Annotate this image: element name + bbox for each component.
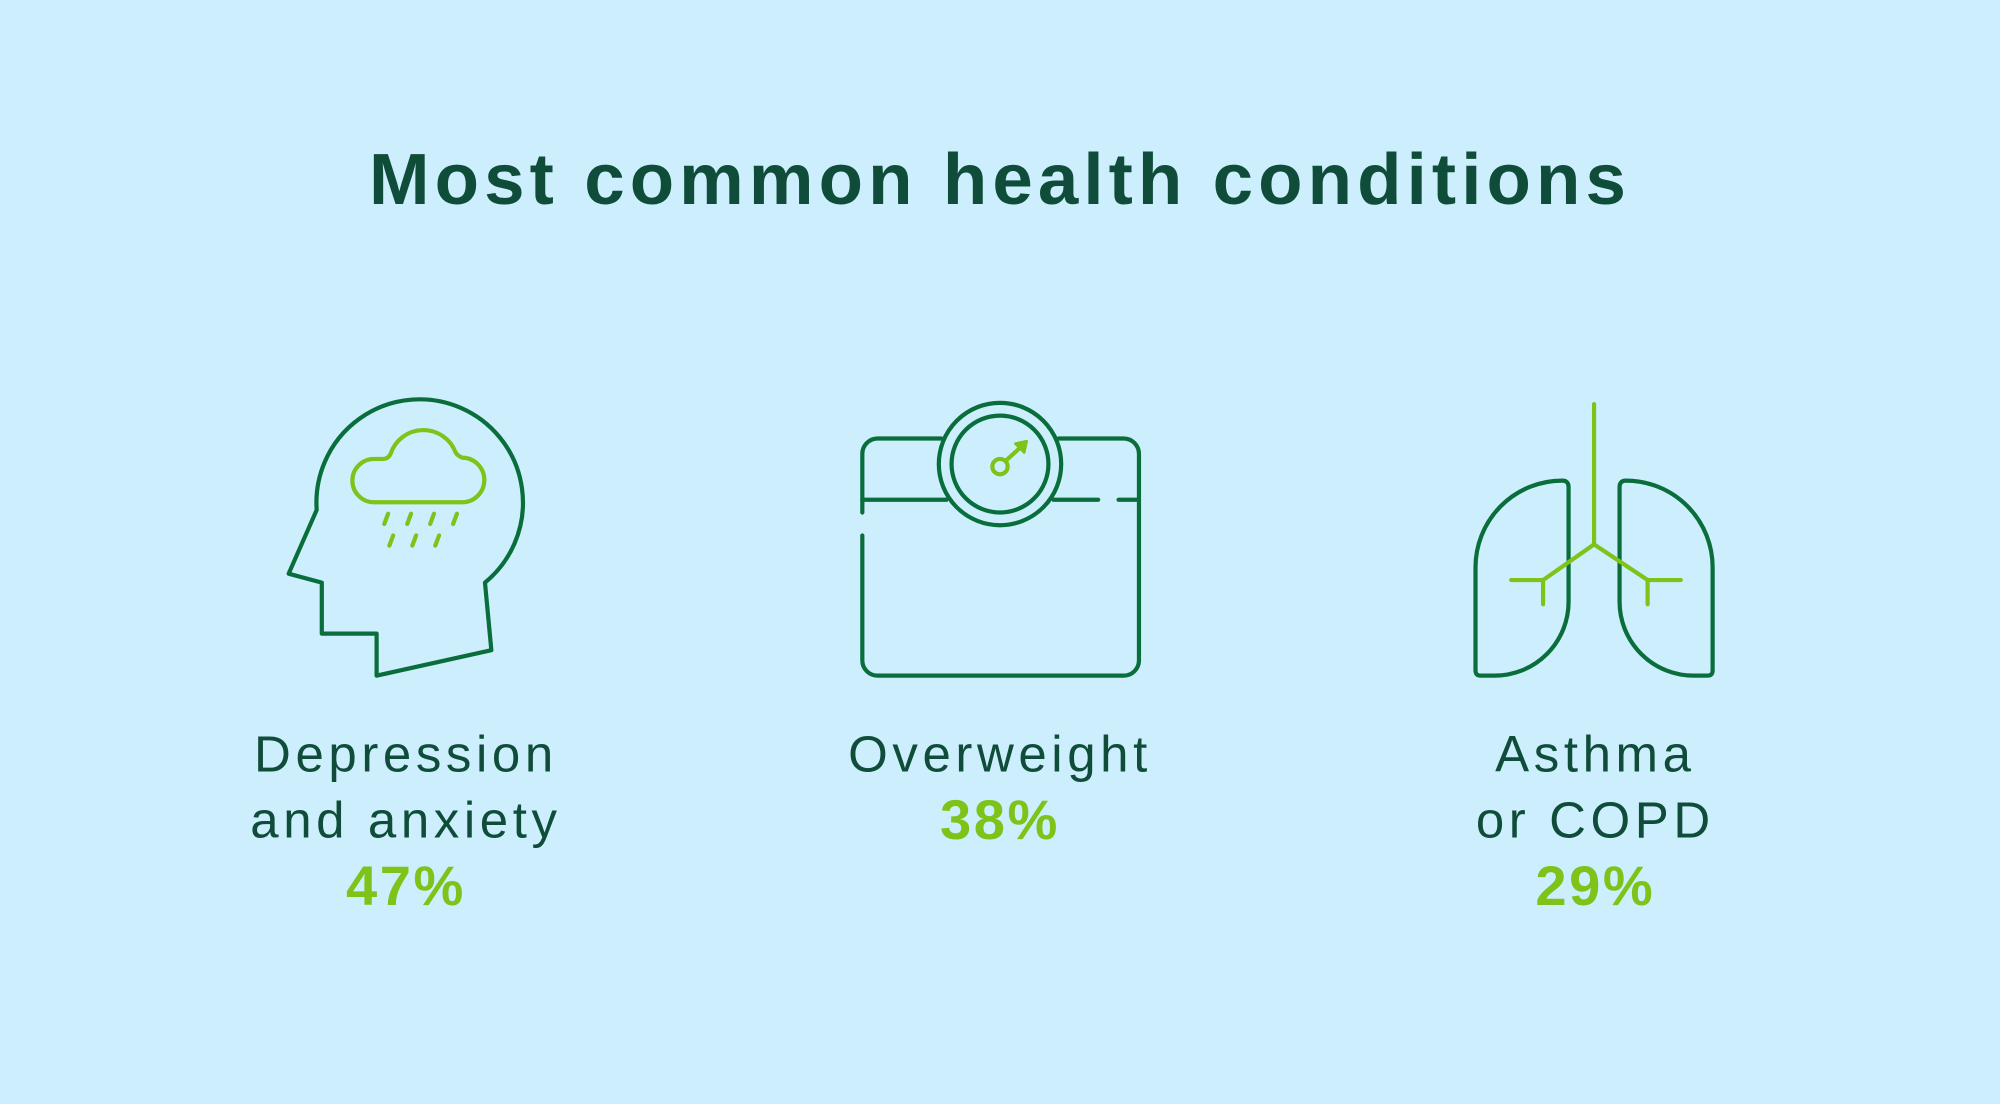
label: depression and anxiety: 47%: [346, 854, 466, 917]
label: depression and anxiety: and anxiety: [250, 792, 562, 849]
label: overweight: 38%: [940, 788, 1060, 851]
label: asthma or COPD: 29%: [1535, 854, 1655, 917]
label: asthma or COPD: [1476, 725, 1715, 917]
icon: lungs: [1476, 404, 1713, 676]
label: asthma or COPD: Asthma: [1495, 725, 1696, 782]
label: depression and anxiety: [250, 725, 562, 917]
label: overweight: Overweight: [848, 725, 1152, 782]
icon: head with rain cloud: [289, 399, 523, 676]
title: Most common health conditions: [369, 139, 1631, 220]
label: asthma or COPD: or COPD: [1476, 792, 1715, 849]
label: depression and anxiety: Depression: [254, 725, 558, 782]
label: overweight: [848, 725, 1152, 851]
icon: weighing scale: [862, 403, 1139, 676]
